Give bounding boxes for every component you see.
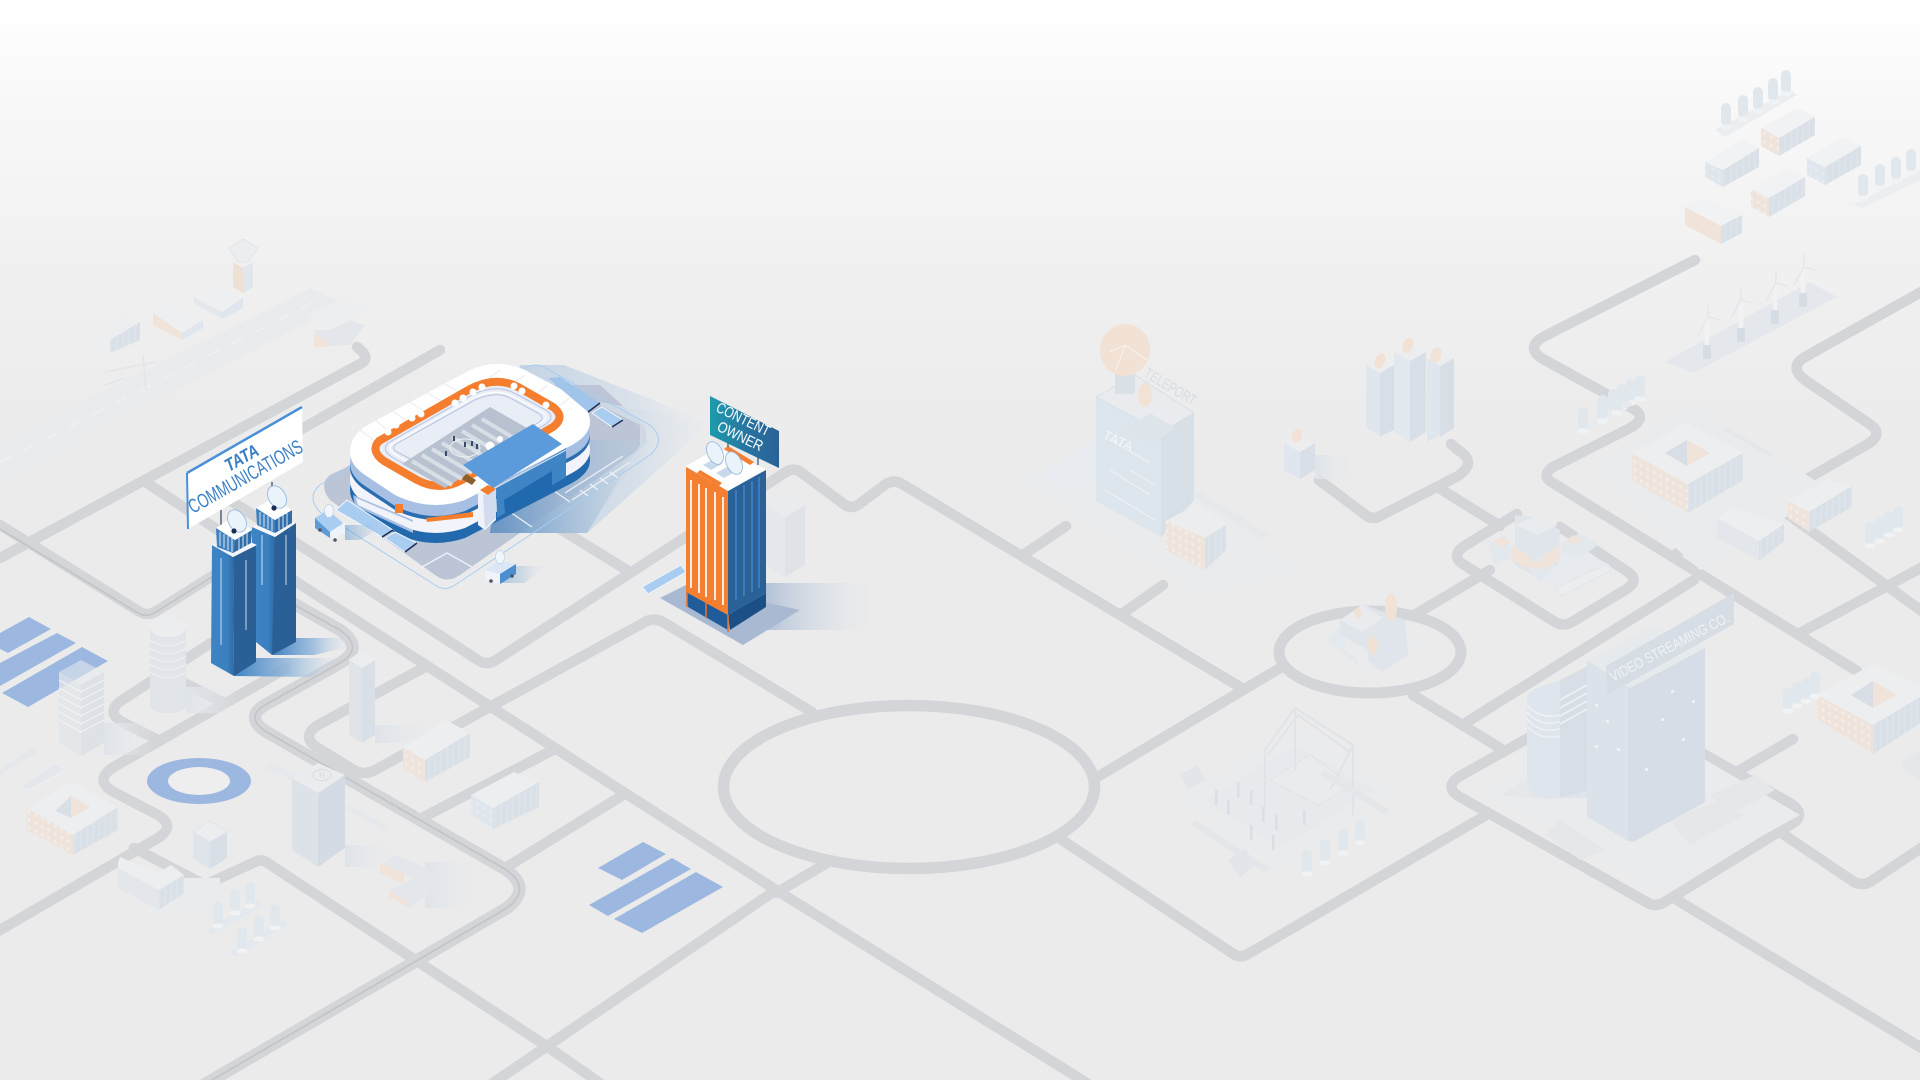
- teleport dish: [1093, 317, 1157, 383]
- roof: [686, 448, 766, 491]
- outside broadcast van right: [485, 550, 545, 584]
- Tata Communications towers: [185, 407, 348, 677]
- airport runway: [0, 288, 345, 482]
- content owner sign: OWNER: [714, 418, 766, 455]
- video streaming sign: VIDEO STREAMING CO.: [1607, 610, 1732, 686]
- lower concourse: [353, 495, 413, 533]
- right courtyard building: [1782, 664, 1920, 780]
- orange ring and stands: [375, 382, 560, 486]
- parking ground: [324, 385, 646, 580]
- entrance panel: [642, 565, 686, 594]
- pitch: [402, 407, 534, 488]
- site panels: [336, 500, 393, 537]
- parking markings: [422, 456, 630, 567]
- stadium site: [313, 364, 711, 588]
- central blue solar panels: [589, 842, 723, 933]
- blue face: [728, 470, 766, 615]
- single small tower: [1284, 428, 1355, 479]
- floodlights: [384, 382, 550, 450]
- players: [445, 436, 478, 456]
- tower shadows: [273, 638, 348, 655]
- wind farm: [1665, 254, 1837, 373]
- covered entrance block: [496, 448, 566, 518]
- orange face: [686, 467, 728, 615]
- airport buildings: [97, 239, 368, 390]
- content owner sign: [710, 396, 779, 468]
- front tower: [211, 545, 234, 676]
- teleport complex: TATA: [1101, 427, 1136, 454]
- billboard: [185, 407, 307, 529]
- teleport complex: TELEPORT: [1141, 365, 1199, 409]
- teleport complex: [1020, 317, 1306, 599]
- railway road: [0, 529, 520, 1080]
- rear tower: [252, 527, 275, 655]
- base: [686, 592, 728, 630]
- square loop cluster: [1488, 515, 1612, 596]
- ghost tower beside content owner: [766, 493, 805, 577]
- left ghost buildings: [0, 617, 445, 790]
- stadium shadow: [490, 365, 711, 533]
- courtyard office block: [1590, 375, 1904, 570]
- stadium walls: [350, 402, 590, 543]
- roof segment lines: [360, 370, 570, 445]
- content owner building: [642, 396, 876, 645]
- site outline: [313, 365, 658, 588]
- blue ring: [147, 758, 251, 804]
- video streaming campus: [1480, 593, 1800, 895]
- road network: [0, 260, 1920, 1080]
- triple towers: [1366, 336, 1454, 442]
- ring building cluster: [1326, 593, 1430, 675]
- billboard: COMMUNICATIONS: [185, 436, 307, 518]
- top right data centres: [1574, 70, 1920, 434]
- concert stage: [1178, 708, 1395, 878]
- rear crown: [256, 508, 275, 533]
- left lower ghost buildings: H: [319, 771, 325, 780]
- left solar panels: [0, 617, 108, 707]
- building shadow: [766, 583, 876, 630]
- billboard: TATA: [221, 440, 262, 475]
- stair tower: [478, 486, 496, 530]
- front crown: [216, 528, 235, 553]
- outside broadcast van left: [315, 504, 385, 542]
- content owner sign: CONTENT: [713, 399, 773, 440]
- left lower ghost buildings: [27, 720, 539, 957]
